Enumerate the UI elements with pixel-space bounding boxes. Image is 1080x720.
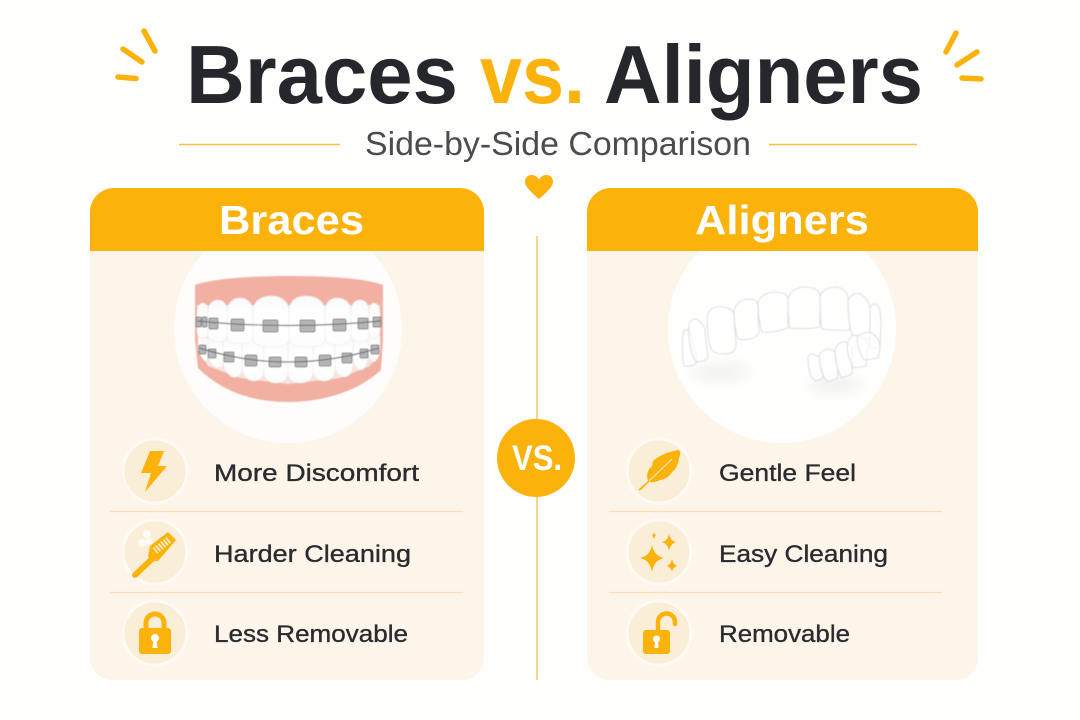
- panel header: [90, 188, 484, 251]
- row: harder cleaning: [123, 520, 411, 584]
- row: gentle feel: Gentle Feel: [719, 460, 856, 487]
- row: easy cleaning: [627, 520, 888, 584]
- row dividers: [609, 512, 942, 592]
- icon: open lock: [627, 601, 691, 665]
- panel header: Aligners: [695, 197, 869, 243]
- icon: right sparkle rays: [946, 33, 981, 79]
- center divider line: [536, 236, 538, 680]
- row: less removable: [123, 601, 408, 665]
- title: Aligners: [604, 28, 923, 121]
- icon: left sparkle rays: [118, 31, 155, 78]
- icon: lightning bolt: [123, 439, 187, 503]
- panel background: [587, 251, 978, 680]
- panel: braces: [90, 188, 484, 680]
- row: more discomfort: [123, 439, 419, 503]
- lower teeth: [198, 336, 380, 383]
- lower arch wire: [199, 348, 379, 362]
- title: [186, 28, 923, 121]
- upper arch wire: [197, 321, 381, 326]
- upper brackets: [196, 317, 381, 332]
- title: vs.: [480, 28, 585, 121]
- illustration: clear aligner: [668, 251, 896, 443]
- row: easy cleaning: Easy Cleaning: [719, 541, 888, 568]
- icon: heart: [525, 175, 553, 199]
- row: removable: [627, 601, 850, 665]
- icon: closed lock: [123, 601, 187, 665]
- icon: toothbrush: [123, 520, 187, 584]
- aligner trays: [682, 287, 881, 382]
- aligner shadows: [692, 368, 861, 389]
- subtitle: Side-by-Side Comparison: [365, 125, 751, 162]
- gums: [195, 276, 383, 402]
- icon: feather: [627, 439, 691, 503]
- upper teeth: [197, 296, 380, 347]
- lower brackets: [199, 345, 379, 367]
- row: more discomfort: More Discomfort: [214, 460, 419, 487]
- illustration: teeth with braces: [174, 251, 402, 443]
- row: harder cleaning: Harder Cleaning: [214, 541, 411, 568]
- panel: aligners: [587, 188, 978, 680]
- title: Braces: [186, 28, 458, 121]
- row: gentle feel: [627, 439, 856, 503]
- vs badge: VS.: [512, 439, 562, 478]
- row: removable: Removable: [719, 621, 850, 648]
- vs badge: [497, 419, 575, 497]
- panel header: Braces: [219, 197, 364, 243]
- row: less removable: Less Removable: [214, 621, 408, 648]
- teeth backing: [197, 305, 380, 384]
- row dividers: [110, 512, 463, 592]
- panel background: [90, 251, 484, 680]
- panel header: [587, 188, 978, 251]
- icon: sparkles: [627, 520, 691, 584]
